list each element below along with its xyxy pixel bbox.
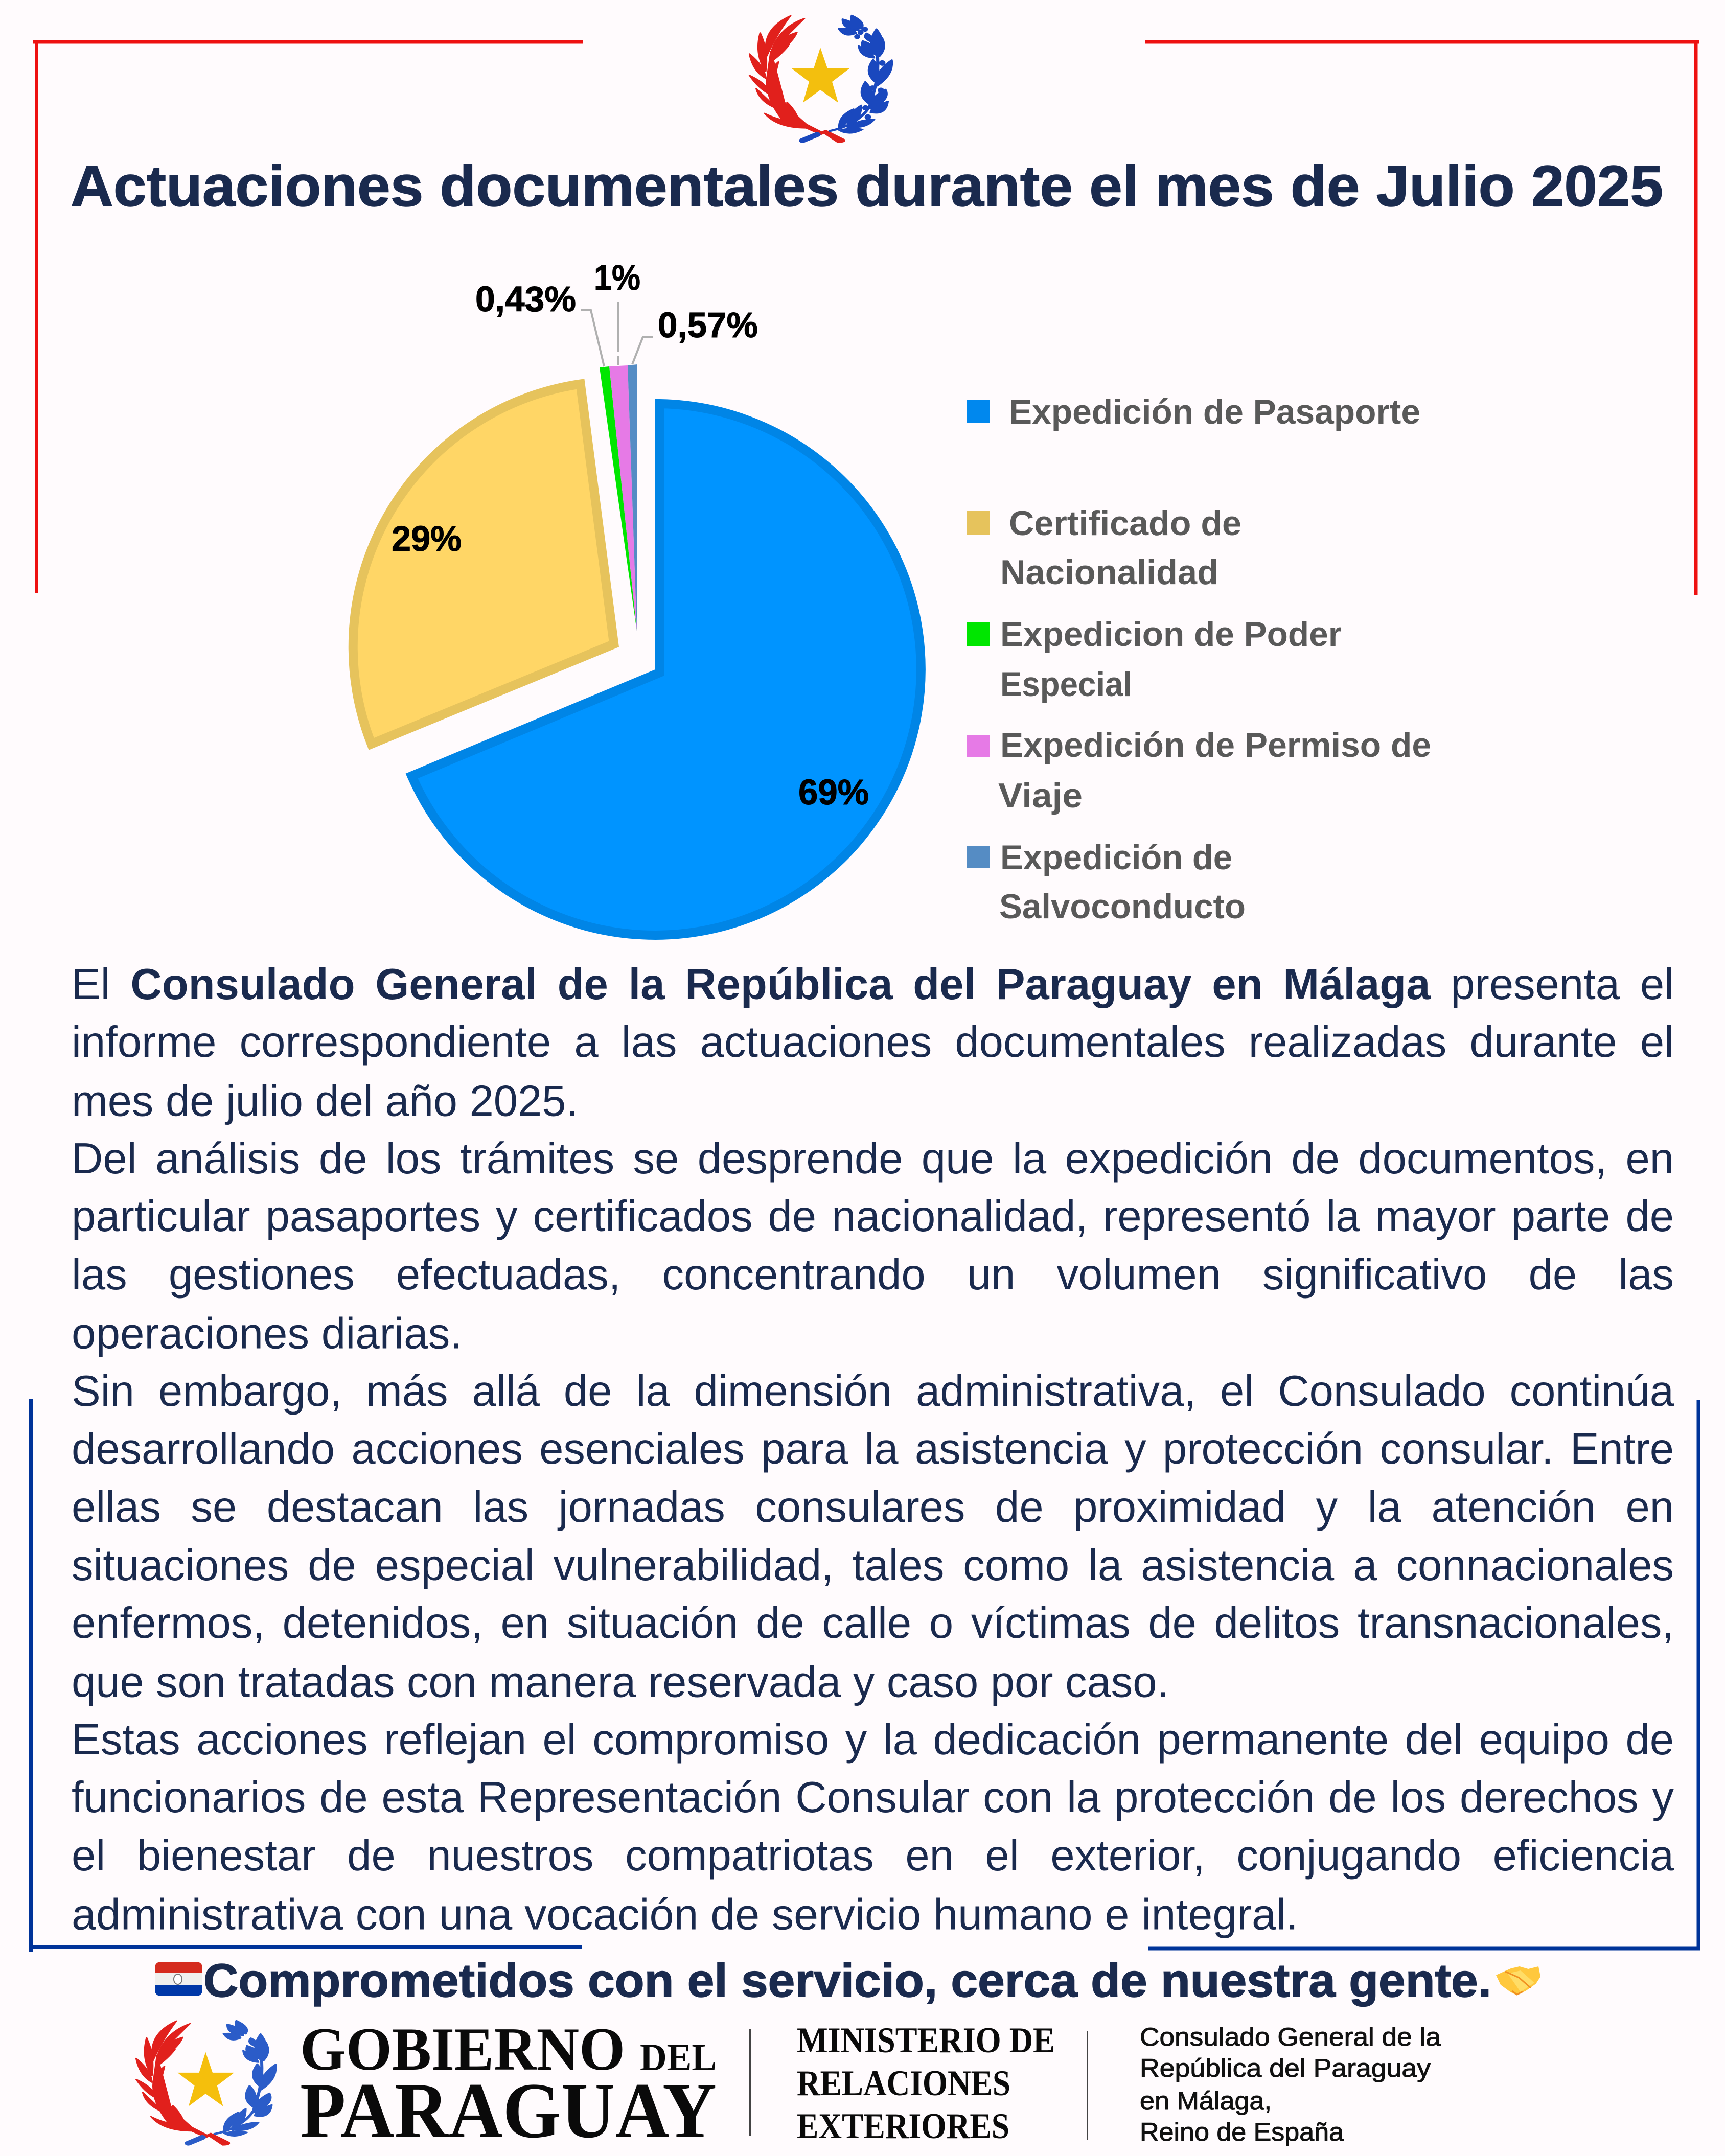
footer: Consulado General — [1140, 2023, 1441, 2146]
legend: Expedición de Permiso de Viaje — [967, 726, 1431, 815]
text block: asistencia consular: situaciones de especial vulnerabilidad, tales como la asistencia a connacionales — [72, 1541, 1674, 1590]
legend: Certificado de Nacionalidad — [967, 504, 1241, 592]
wordmark GOBIERNO DEL: DEL — [640, 2036, 717, 2079]
label 29%: 29% — [392, 519, 462, 559]
text block: análisis: operaciones diarias. — [72, 1309, 462, 1358]
divider — [749, 2029, 751, 2136]
slogan: Comprometidos con el servicio, cerca de nuestra gente. — [203, 1955, 1491, 2007]
label 0,43%: 0,43% — [475, 279, 576, 319]
text block: compromiso — [72, 1715, 1674, 1939]
slice: Poder Especial — [600, 366, 637, 631]
icon: emblem small — [136, 2021, 276, 2145]
text block: asistencia consular: que son tratadas con manera reservada y caso por caso. — [72, 1658, 1169, 1706]
legend: Expedición de Salvoconducto: Expedición de — [1000, 838, 1232, 877]
text block: asistencia consular: enfermos, detenidos, en situación de calle o víctimas de delitos transnacionales, — [72, 1599, 1674, 1648]
title: Actuaciones documentales durante el mes de Julio 2025 — [71, 154, 1663, 218]
footer: Consulado General: en Málaga, — [1140, 2087, 1272, 2115]
footer: Ministerio de Relaciones Exteriores — [797, 2021, 1055, 2146]
legend: Expedicion de Poder Especial: Especial — [1000, 665, 1132, 704]
slice: Salvoconducto — [628, 364, 637, 631]
text block: introduction: informe correspondiente a las actuaciones documentales realizadas durante el — [72, 1018, 1674, 1067]
text block: asistencia consular: Sin embargo, más allá de la dimensión administrativa, el Consulado continúa — [72, 1367, 1674, 1416]
text block: análisis: Del análisis de los trámites se desprende que la expedición de documentos, en — [72, 1134, 1674, 1183]
footer: Consulado General: Consulado General de la — [1140, 2023, 1441, 2051]
text block: introduction: El Consulado General de la República del Paraguay en Málaga presenta el — [72, 960, 1674, 1009]
footer logo: Gobierno del Paraguay — [136, 2015, 717, 2154]
legend: Certificado de Nacionalidad: Nacionalidad — [1000, 553, 1218, 592]
label 69%: 69% — [798, 772, 869, 812]
wordmark GOBIERNO DEL: GOBIERNO — [300, 2015, 625, 2083]
icon: handshake — [1496, 1966, 1540, 1995]
text block: asistencia consular: ellas se destacan las jornadas consulares de proximidad y la atención en — [72, 1483, 1674, 1532]
pie chart — [353, 258, 921, 935]
legend: Expedicion de Poder Especial: Expedicion de Poder — [1000, 615, 1342, 654]
legend: Expedición de Permiso de Viaje: Expedición de Permiso de — [1000, 726, 1431, 764]
text block: análisis: particular pasaportes y certificados de nacionalidad, representó la mayor parte de — [72, 1192, 1674, 1241]
text block: asistencia consular: desarrollando acciones esenciales para la asistencia y protección consular. Entre — [72, 1425, 1674, 1473]
label 0,57%: 0,57% — [658, 305, 758, 345]
text block: introduction: mes de julio del año 2025. — [72, 1077, 578, 1125]
label 1%: 1% — [594, 258, 640, 297]
slice: Permiso de Viaje — [609, 365, 637, 631]
emblem: wreath and star — [749, 15, 892, 143]
footer: Consulado General: Reino de España — [1140, 2118, 1344, 2146]
slice: Expedición de Pasaporte 69% — [412, 404, 921, 935]
footer: Ministerio de Relaciones Exteriores: EXTERIORES — [797, 2106, 1009, 2146]
icon: Paraguay flag — [155, 1962, 202, 1996]
divider — [1087, 2031, 1088, 2140]
red frame top left — [33, 42, 583, 593]
leader lines — [581, 302, 653, 366]
wordmark PARAGUAY: PARAGUAY — [300, 2067, 717, 2154]
closing line — [155, 1955, 1540, 2007]
legend: Expedición de Pasaporte: Expedición de Pasaporte — [1009, 392, 1420, 431]
text block: compromiso: administrativa con una vocación de servicio humano e integral. — [72, 1890, 1298, 1939]
red frame top right — [1145, 42, 1699, 595]
blue frame bottom right — [1148, 1400, 1700, 1950]
slice: Certificado de Nacionalidad 29% — [353, 384, 614, 744]
footer: Ministerio de Relaciones Exteriores: RELACIONES — [797, 2064, 1010, 2103]
text block: análisis — [72, 1134, 1674, 1358]
legend: Expedición de Salvoconducto — [967, 838, 1246, 926]
legend: Certificado de Nacionalidad: Certificado de — [1009, 504, 1241, 543]
blue frame bottom left — [30, 1399, 582, 1952]
text block: compromiso: el bienestar de nuestros compatriotas en el exterior, conjugando eficiencia — [72, 1832, 1674, 1880]
legend — [967, 392, 1431, 926]
text block: compromiso: Estas acciones reflejan el compromiso y la dedicación permanente del equipo de — [72, 1715, 1674, 1764]
text block: compromiso: funcionarios de esta Representación Consular con la protección de los derechos y — [72, 1773, 1674, 1822]
legend: Expedición de Salvoconducto: Salvoconducto — [999, 887, 1246, 926]
text block: introduction — [72, 960, 1674, 1125]
footer: Ministerio de Relaciones Exteriores: MINISTERIO DE — [797, 2021, 1055, 2060]
footer: Consulado General: República del Paraguay — [1140, 2054, 1431, 2082]
text block: asistencia consular — [72, 1367, 1674, 1706]
legend: Expedición de Permiso de Viaje: Viaje — [998, 776, 1083, 815]
legend: Expedicion de Poder Especial — [967, 615, 1342, 704]
text block: análisis: las gestiones efectuadas, concentrando un volumen significativo de las — [72, 1250, 1674, 1299]
